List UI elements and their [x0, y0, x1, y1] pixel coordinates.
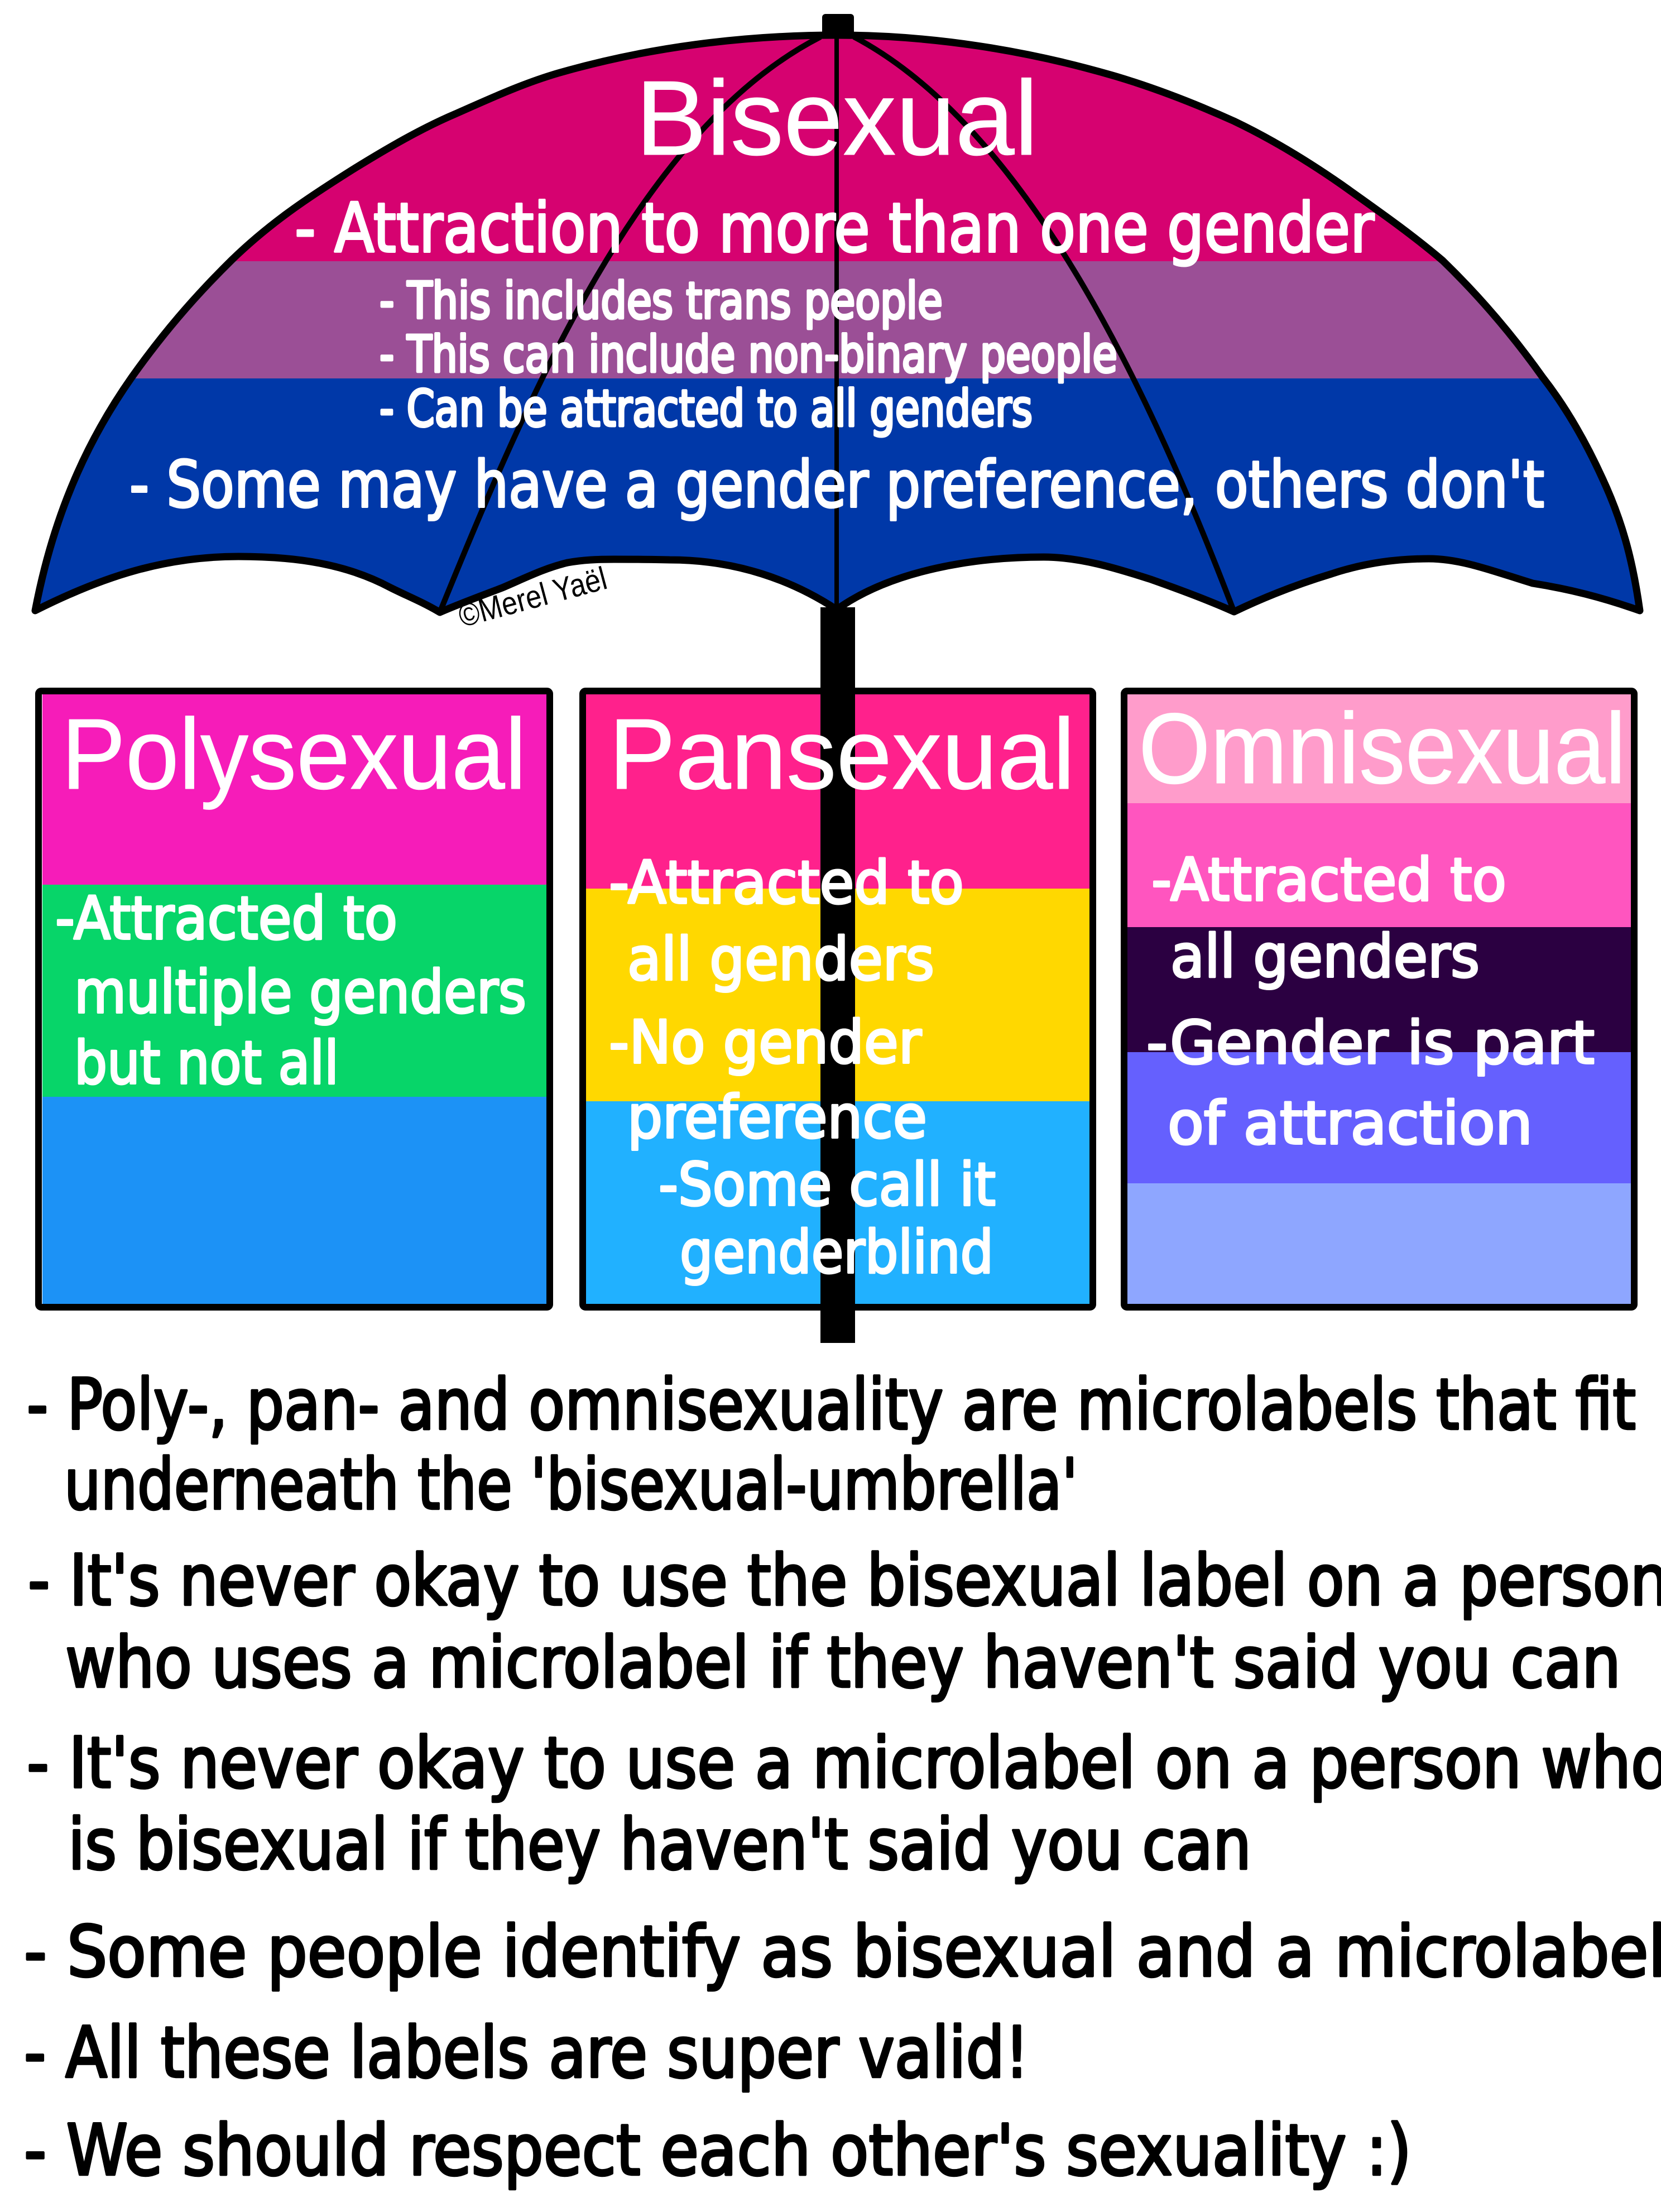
bullet: microlabel consent — [27, 1722, 1661, 1885]
polysexual text — [55, 698, 526, 1097]
umbrella pole — [820, 607, 855, 1343]
panel: polysexual — [39, 691, 550, 1307]
omnisexual text — [1139, 693, 1626, 1158]
explanatory bullet list — [24, 1364, 1661, 2191]
umbrella — [0, 0, 1661, 624]
bullet: respect: - We should respect each other's sexuality :) — [24, 2109, 1412, 2191]
bullet: microlabels: underneath the 'bisexual-umbrella' — [64, 1443, 1078, 1525]
definition line: - Attraction to more than one gender — [295, 189, 1375, 268]
panel: pansexual — [583, 691, 1093, 1307]
umbrella text — [129, 59, 1544, 522]
canopy ribs — [440, 35, 1234, 612]
pansexual definition: preference — [627, 1083, 927, 1151]
omnisexual definition: -Gender is part — [1146, 1009, 1595, 1077]
polysexual definition: -Attracted to — [55, 884, 397, 953]
omnisexual definition: all genders — [1170, 922, 1480, 991]
panel: omnisexual — [1124, 691, 1634, 1307]
pansexual definition: genderblind — [680, 1218, 993, 1287]
omnisexual definition — [1146, 846, 1595, 1158]
detail: non-binary people: - This can include non-binary people — [380, 325, 1117, 384]
bisexual flag canopy stripes — [40, 39, 1635, 607]
heading: omnisexual: Omnisexual — [1139, 693, 1626, 805]
polysexual definition: multiple genders — [74, 958, 526, 1026]
pansexual definition: -No gender — [609, 1008, 921, 1077]
heading: pansexual: Pansexual — [609, 698, 1075, 810]
omnisexual definition: of attraction — [1168, 1089, 1533, 1158]
umbrella pole top — [822, 14, 854, 47]
bullet: microlabel consent: is bisexual if they haven't said you can — [68, 1803, 1251, 1885]
bullet: microlabels — [27, 1364, 1636, 1525]
detail: all genders: - Can be attracted to all genders — [380, 380, 1033, 438]
credit signature: ©Merel Yaël — [455, 560, 611, 635]
bullet: valid: - All these labels are super valid! — [24, 2012, 1029, 2094]
bullet: bisexual label consent — [28, 1539, 1661, 1704]
detail: trans people: - This includes trans people — [380, 272, 943, 330]
heading: bisexual: Bisexual — [636, 59, 1038, 177]
pansexual text — [609, 698, 1075, 1287]
pansexual definition: -Some call it — [659, 1150, 996, 1219]
heading: polysexual: Polysexual — [61, 698, 526, 810]
pansexual definition — [609, 848, 996, 1287]
polysexual definition: but not all — [74, 1029, 339, 1097]
canopy outline — [35, 35, 1640, 612]
polysexual definition — [55, 884, 526, 1097]
pansexual definition: -Attracted to — [609, 848, 964, 917]
pansexual definition: all genders — [627, 925, 934, 994]
omnisexual definition: -Attracted to — [1151, 846, 1506, 914]
